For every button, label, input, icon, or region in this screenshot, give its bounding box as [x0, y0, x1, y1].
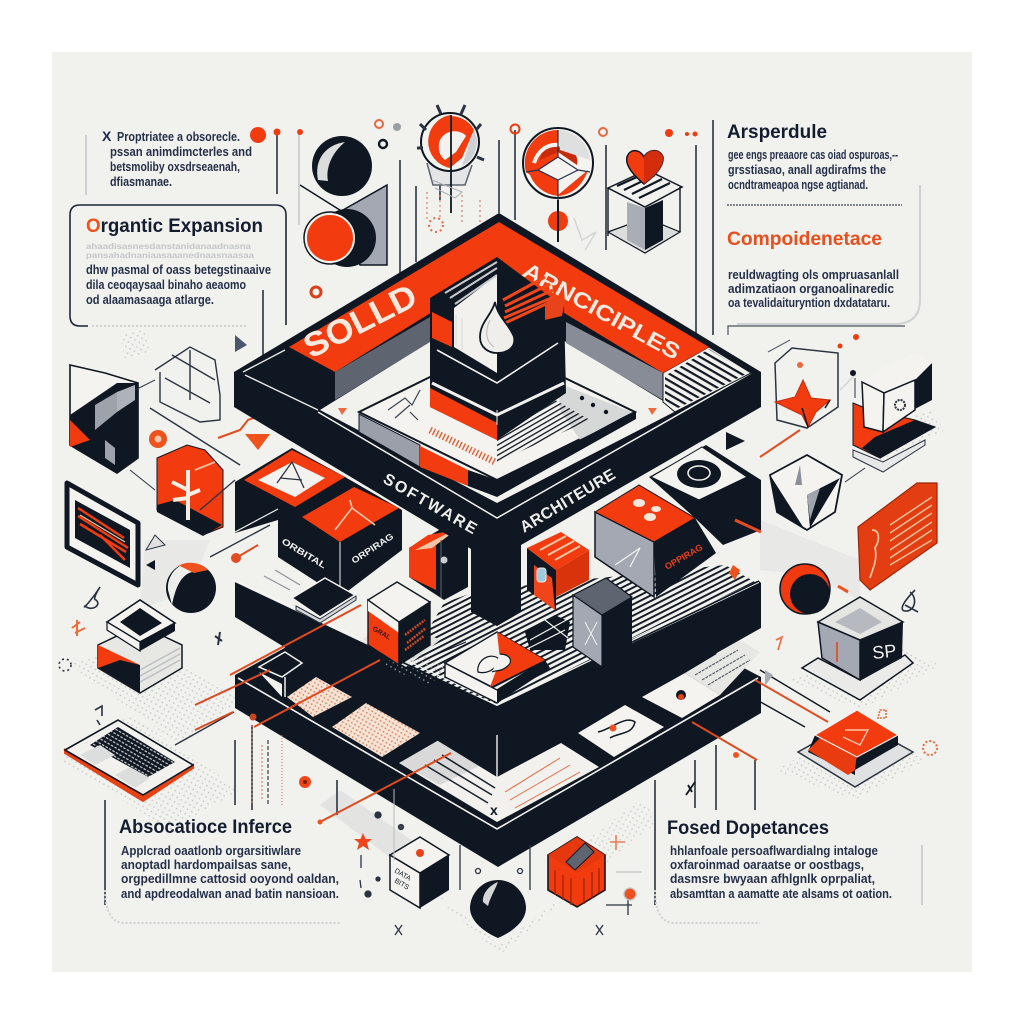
- orange strokes: [430, 430, 495, 462]
- panel: Compoidenetace: oa tevalidaituryntion dxdatataru.: [728, 296, 890, 310]
- body text: [86, 263, 271, 307]
- recessed floor: [320, 300, 678, 503]
- icon: round diamond: [523, 128, 593, 242]
- icon: stacked box: [98, 600, 182, 693]
- bottom left section: Absocatioce Inferce: Absocatioce Inferce: [119, 817, 292, 838]
- small black grid tile: [525, 615, 570, 650]
- bottom left section: Absocatioce Inferce: [119, 817, 339, 901]
- triangles and arrows: [146, 335, 773, 686]
- box label: OPPIRAG: [663, 542, 704, 572]
- wave lines: [497, 400, 590, 462]
- icon: script curl and markers: [59, 587, 222, 725]
- orange roof band: [289, 222, 709, 373]
- icon: orange star: [354, 833, 372, 850]
- hatched corner: [663, 347, 751, 412]
- layer 2: middle plate: [235, 553, 761, 777]
- bottom right section: Fosed Dopetances: hhlanfoale persoaflwardialng intaloge: [670, 844, 878, 858]
- layer 3: base plate: [235, 640, 761, 867]
- dotted panels: [287, 677, 420, 757]
- heading: Organtic Expansion: [86, 216, 263, 237]
- bottom right section: Fosed Dopetances: [667, 818, 892, 901]
- faded text: [86, 241, 254, 260]
- box labels: [280, 531, 395, 571]
- dotted ground textures: [60, 330, 945, 955]
- bottom left section: Absocatioce Inferce: Applcrad oaatlonb orgarsitiwlare: [121, 844, 301, 858]
- icon: orange card: [858, 483, 937, 590]
- orange tile with paper: [244, 450, 345, 507]
- labels: SOFTWARE ARCHITECTURE: ARCHITEURE: [517, 466, 619, 536]
- orange stripes: [503, 277, 556, 324]
- panel: Compoidenetace: adimzatiaon organoalinaredic: [728, 282, 894, 296]
- panel: Arsperdule: grsstiasao, anall agdirafms the: [728, 163, 886, 177]
- central tile: [445, 632, 550, 703]
- panel: Arsperdule: ocndtrameapoa ngse agtianad.: [728, 178, 868, 192]
- icon: black sphere drop: [470, 880, 526, 938]
- panel: Arsperdule: [727, 122, 902, 205]
- right cluster icons: [768, 334, 937, 787]
- box labels: ORPIRAG: [350, 531, 395, 566]
- text block: intro: X: [102, 128, 112, 144]
- white separators: [437, 343, 558, 383]
- icon: sphere: [166, 563, 216, 613]
- small black tile: [292, 578, 356, 623]
- dots and marks: [360, 789, 642, 935]
- heading: SOLLD ARNCICIPLES: ARNCICIPLES: [519, 258, 685, 365]
- labels: SOFTWARE ARCHITECTURE: SOFTWARE: [380, 471, 480, 538]
- bottom right section: Fosed Dopetances: dasmsre bwyaan afhlgnlk oprpaliat,: [670, 872, 875, 886]
- small black-orange box left of pillar: [409, 527, 468, 600]
- icon: star in outline: [768, 334, 859, 428]
- faded text: pansahadnaniaasaaanednaasnaasaa: [86, 250, 254, 260]
- front gray faces of arms: [335, 317, 430, 400]
- right box: [595, 485, 716, 597]
- icon: dark box: [70, 365, 155, 490]
- bottom right section: Fosed Dopetances: Fosed Dopetances: [667, 818, 829, 839]
- panel: Compoidenetace: [727, 229, 905, 335]
- label: SP: SP: [871, 641, 897, 663]
- top plate body: [234, 213, 761, 626]
- bottom centre icons: [354, 789, 642, 938]
- icon: data cube: BITS: [393, 878, 410, 892]
- left hanging box: [235, 448, 402, 597]
- pillar: [471, 510, 521, 626]
- white cube with orange face: [368, 582, 430, 665]
- small dark block: [259, 652, 302, 697]
- icon: light bulb: [417, 105, 484, 232]
- tray: [359, 345, 636, 497]
- icon: faceted gem: [770, 455, 865, 530]
- bottom left section: Absocatioce Inferce: orgpedillmne cattosid ooyond oaldan,: [121, 872, 339, 886]
- icon: data cube: DATA: [393, 868, 412, 883]
- body text: dhw pasmal of oass betegstinaaive: [86, 263, 271, 277]
- body text: dila ceoqaysaal binaho aeaomo: [86, 278, 246, 292]
- body text: od alaamasaaga atlarge.: [86, 293, 214, 307]
- left cluster icons: [59, 347, 240, 801]
- icon: laptop: [65, 720, 193, 801]
- icon: data cube: [390, 837, 449, 908]
- box labels: ORBITAL: [280, 536, 329, 571]
- bottom left section: Absocatioce Inferce: and apdreodalwan anad batin nansioan.: [121, 887, 339, 901]
- right panels: [578, 640, 760, 757]
- icon: orange button: [798, 710, 913, 787]
- tray dots: [580, 396, 608, 414]
- script curl and markers: [776, 590, 937, 755]
- faint vertical guide lines: [86, 130, 922, 923]
- icon: black sphere: [312, 136, 372, 196]
- bottom field markers: [252, 725, 739, 805]
- panel: Arsperdule: gee engs preaaore cas oiad ospuroas,--: [728, 148, 898, 162]
- central stacked block: [430, 257, 566, 440]
- icon: orange dot: [149, 430, 167, 448]
- panel: Arsperdule: Arsperdule: [727, 122, 827, 143]
- gear block right: [649, 445, 761, 545]
- panel: Compoidenetace: reuldwagting ols ompruasanlall: [728, 268, 899, 282]
- tiny markers: [338, 408, 347, 415]
- icon: orange circle and gray wedge: [300, 185, 387, 267]
- bottom right section: Fosed Dopetances: absamttan a aamatte ate alsams ot oation.: [670, 887, 892, 901]
- water drop: [480, 302, 514, 353]
- icon: outlined document: [150, 347, 240, 465]
- icon: heart on pedestal: [574, 151, 682, 253]
- connector strokes: [175, 407, 830, 824]
- icon: orange battery cube: [548, 837, 605, 907]
- text block: intro: betsmoliby oxsdrseaenah,: [110, 160, 240, 174]
- vertical connector lines: [105, 120, 755, 905]
- orange box right of pillar: [527, 532, 589, 610]
- icon: tablet: [67, 483, 138, 585]
- cube label: GRAL: [371, 626, 392, 642]
- heading: SOLLD ARNCICIPLES: SOLLD: [297, 277, 423, 366]
- panel: Organic Expansion: [70, 205, 286, 326]
- faded text: ahaadisasnesdanstanidanaadnasna: [86, 241, 251, 251]
- heading: SOLLD ARNCICIPLES: [297, 258, 685, 366]
- bottom right section: Fosed Dopetances: oxfaroinmad oaraatse or oostbags,: [670, 858, 864, 872]
- labels: SOFTWARE ARCHITECTURE: [380, 466, 619, 538]
- bottom left section: Absocatioce Inferce: anoptadl hardompailsas sane,: [121, 858, 291, 872]
- icon: orange cube with plant: [157, 445, 223, 536]
- icon: orange crescent sphere: [780, 564, 848, 614]
- orange top with mark: [302, 487, 399, 542]
- icon: white cube on orange base: [850, 353, 935, 472]
- text block: intro: [102, 128, 252, 189]
- icon: SP box: [802, 597, 913, 700]
- text block: intro: dfiasmanae.: [110, 175, 172, 189]
- top small markers: [250, 120, 698, 297]
- panel: Compoidenetace: Compoidenetace: [727, 229, 882, 250]
- x mark: x: [490, 802, 498, 818]
- text block: intro: Proptriatee a obsorecle.: [117, 130, 240, 144]
- gray tall box: [573, 578, 632, 667]
- text block: intro: pssan animdimcterles and: [110, 145, 252, 159]
